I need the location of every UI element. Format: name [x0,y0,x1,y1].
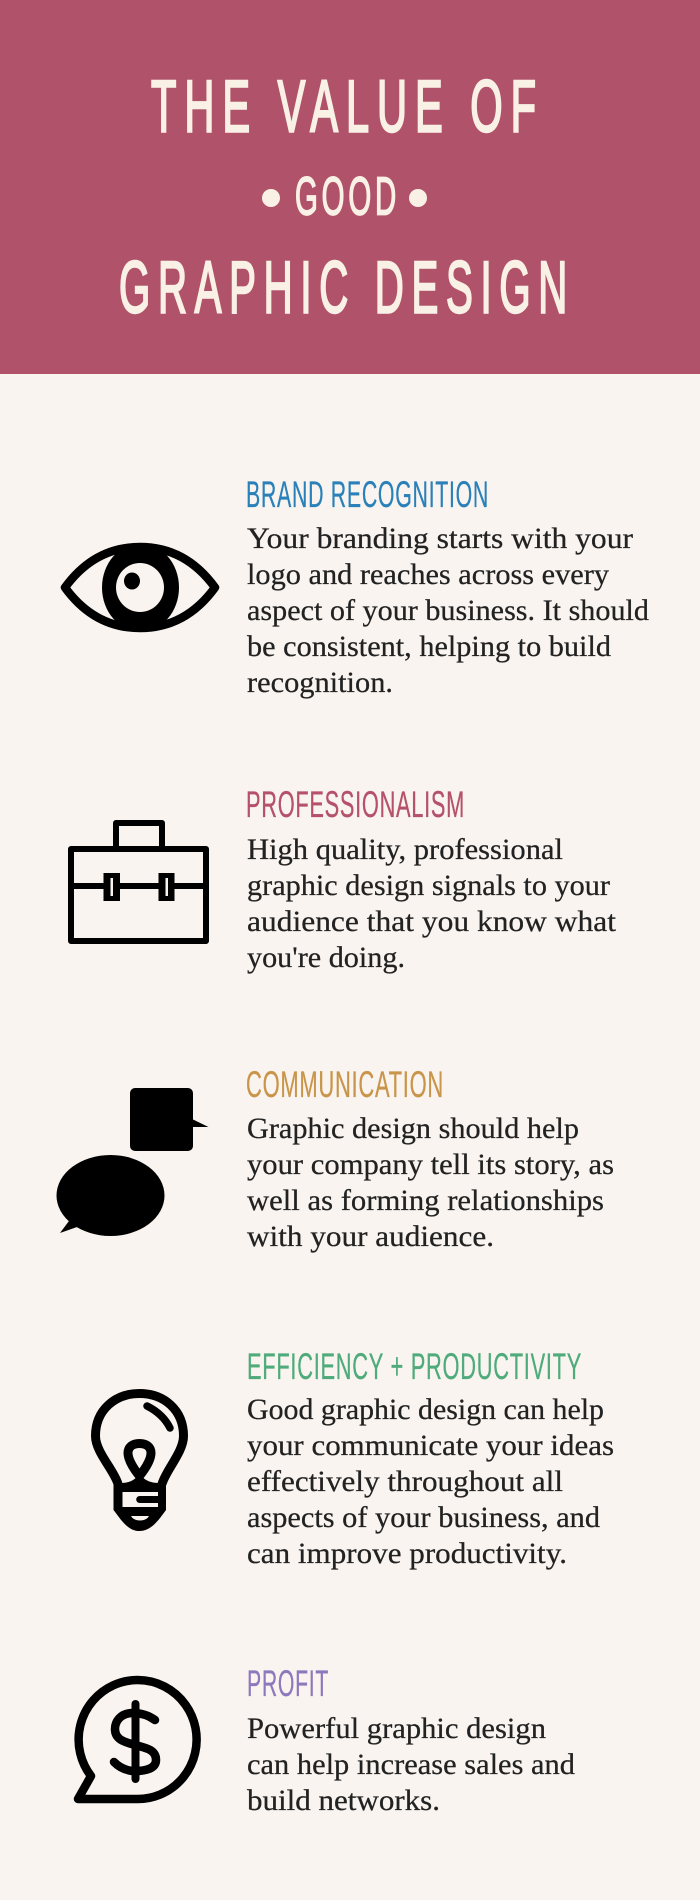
text: communication body [247,1112,614,1253]
text: profit body: Powerful graphic design [247,1712,546,1745]
heading: brand recognition: BRAND RECOGNITION [246,474,489,515]
panel: communication [56,1064,614,1253]
icon: light bulb [96,1394,184,1531]
title line: good with dots [262,166,427,226]
text: brand recognition body [247,522,649,699]
text: brand recognition body: be consistent, helping to build [247,630,611,663]
title line: good with dots: GOOD [295,166,400,226]
text: efficiency body: your communicate your ideas [247,1429,614,1462]
text: profit body: can help increase sales and [247,1748,575,1781]
icon: eye [65,544,215,632]
text: brand recognition body: aspect of your business. It should [247,594,649,627]
icon: briefcase [71,823,207,941]
text: brand recognition body: recognition. [247,666,393,699]
panel: professionalism [71,784,617,974]
text: efficiency body: aspects of your business, and [247,1501,600,1534]
panel: profit [78,1663,575,1817]
text: communication body: Graphic design should help [247,1112,579,1145]
text: professionalism body: you're doing. [247,941,405,974]
heading: professionalism: PROFESSIONALISM [246,784,465,825]
panel: brand recognition [65,474,649,699]
text: efficiency body: can improve productivity. [247,1537,567,1570]
text: efficiency body: effectively throughout all [247,1465,563,1498]
icon: speech bubbles [56,1088,208,1236]
text: efficiency body: Good graphic design can help [247,1393,604,1426]
text: communication body: with your audience. [247,1220,494,1253]
text: communication body: well as forming relationships [247,1184,604,1217]
text: brand recognition body: Your branding starts with your [247,522,633,555]
text: profit body [247,1712,575,1817]
heading: communication: COMMUNICATION [246,1064,444,1105]
text: professionalism body [247,833,617,974]
text: efficiency body [247,1393,614,1570]
text: professionalism body: High quality, professional [247,833,563,866]
text: profit body: build networks. [247,1784,440,1817]
text: brand recognition body: logo and reaches across every [247,558,609,591]
panel: efficiency + productivity [96,1346,614,1570]
icon: dollar speech bubble [78,1680,197,1799]
text: professionalism body: graphic design signals to your [247,869,610,902]
text: communication body: your company tell its story, as [247,1148,614,1181]
heading: profit: PROFIT [247,1663,329,1704]
panel: title header [0,0,700,374]
text: professionalism body: audience that you know what [247,905,617,938]
